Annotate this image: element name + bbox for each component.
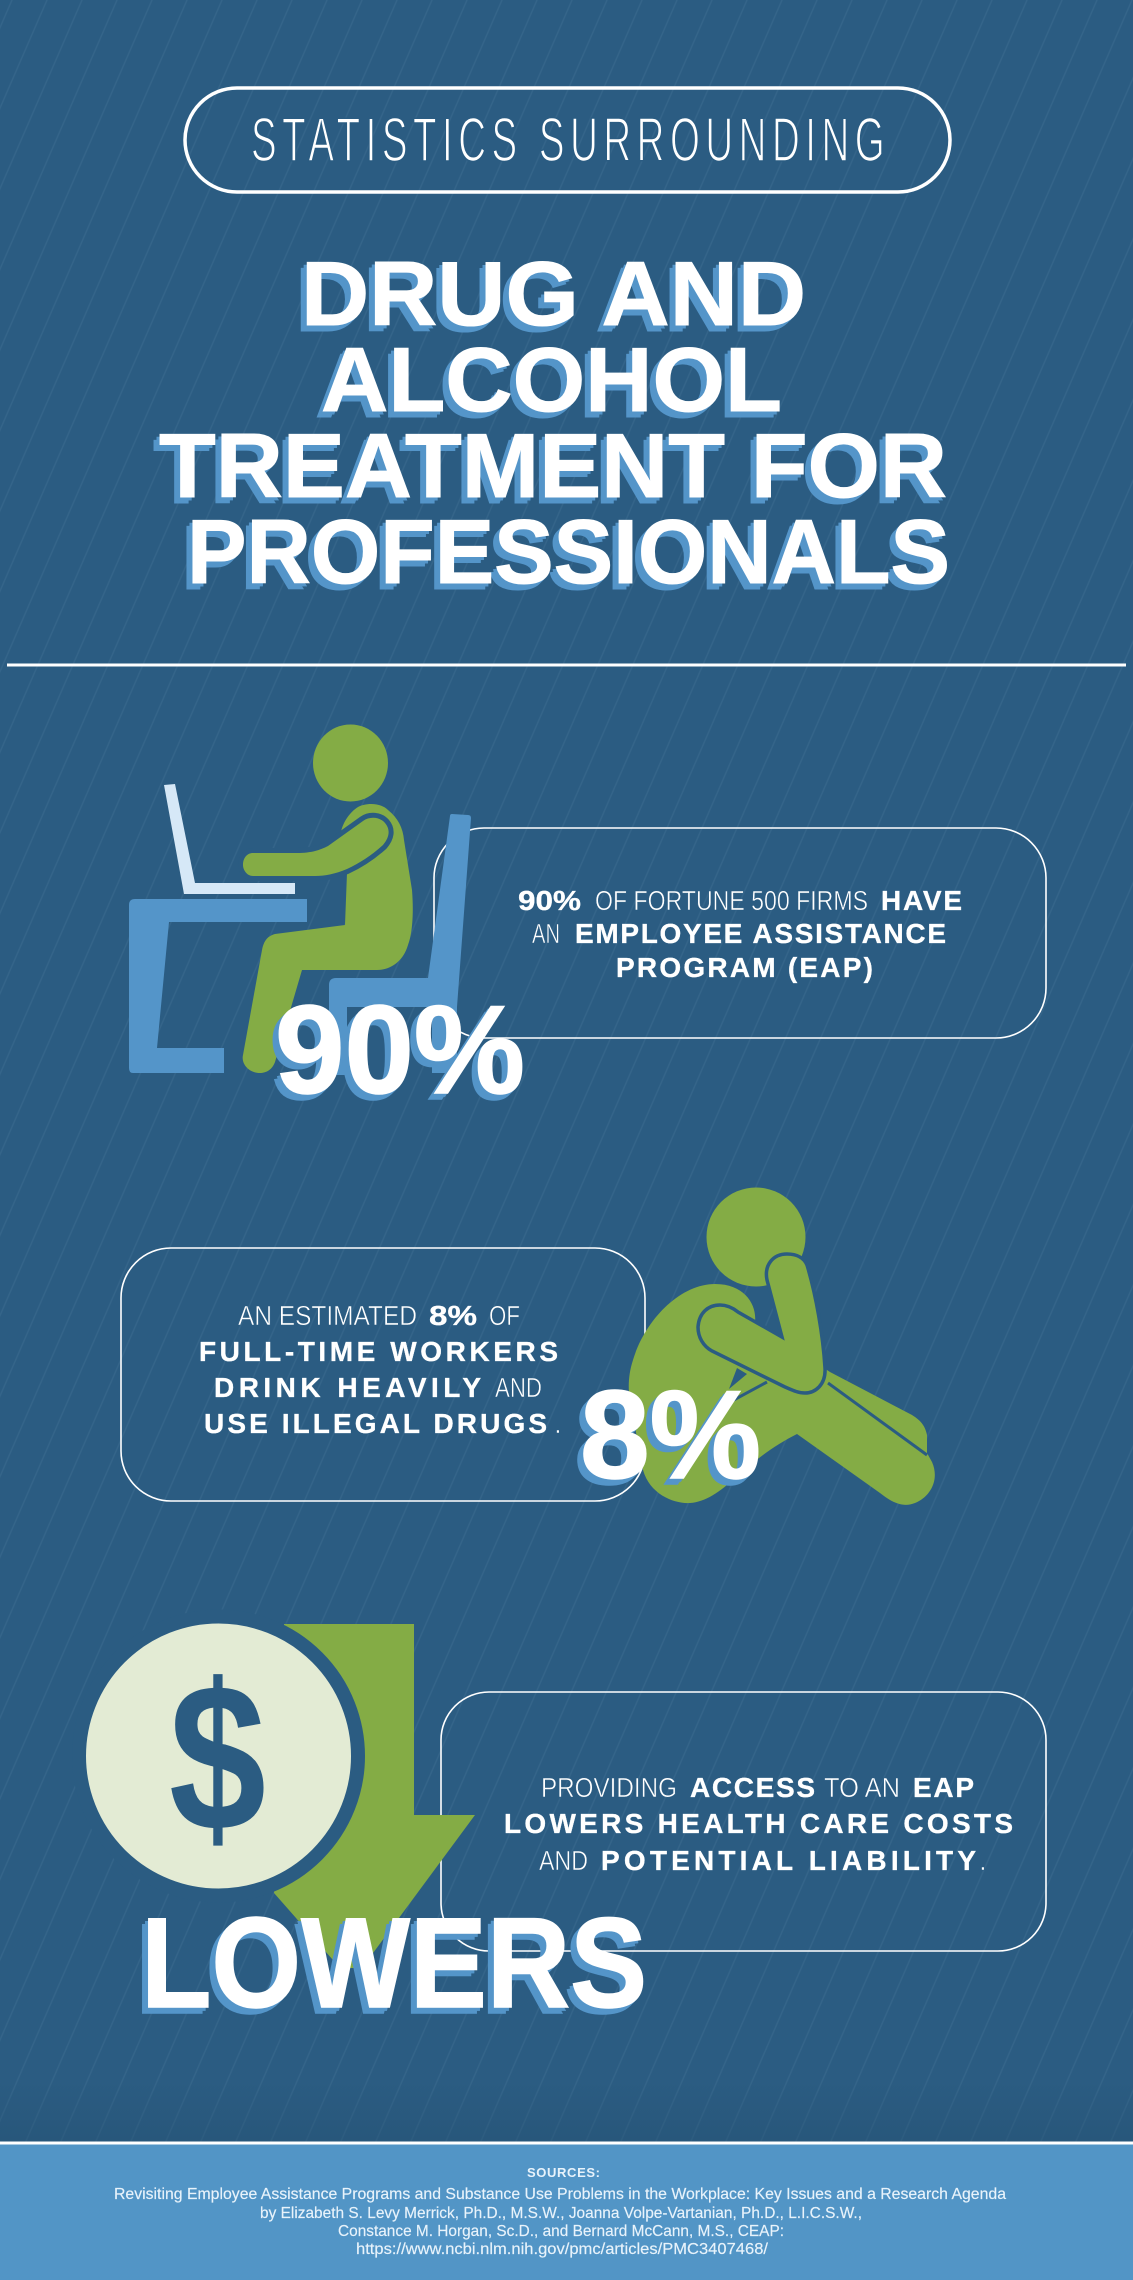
title: PROFESSIONALS	[187, 502, 950, 603]
icon: down arrow	[274, 1624, 475, 1968]
card text: access to an EAP	[504, 1772, 1013, 1876]
icon: dollar coin	[79, 1616, 358, 1896]
card text: access to an EAP: .	[979, 1845, 987, 1876]
chair	[329, 814, 471, 1075]
header pill: statistics surrounding	[185, 88, 950, 192]
gap between thighs	[729, 1368, 747, 1389]
footer: sources: Constance M. Horgan, Sc.D., and Bernard McCann, M.S., CEAP:	[338, 2223, 784, 2240]
title: ALCOHOL	[321, 330, 782, 431]
panel: 90 percent card	[434, 828, 1046, 1038]
desk	[129, 899, 307, 1073]
footer: sources: SOURCES:	[527, 2165, 600, 2180]
card text: full-time workers: AN ESTIMATED	[238, 1300, 417, 1331]
footer: sources: https://www.ncbi.nlm.nih.gov/pmc/articles/PMC3407468/	[356, 2241, 769, 2258]
torso and leg	[243, 804, 413, 1073]
card text: access to an EAP: EAP	[913, 1772, 974, 1803]
card text: full-time workers: USE ILLEGAL DRUGS	[204, 1408, 547, 1439]
panel: 8 percent card	[121, 1248, 645, 1501]
card text: full-time workers: .	[554, 1408, 562, 1439]
card text: access to an EAP: POTENTIAL LIABILITY	[601, 1845, 976, 1876]
card text: full-time workers: 8%	[429, 1300, 477, 1331]
head	[313, 724, 388, 802]
card text: access to an EAP: AND	[539, 1845, 588, 1876]
card text: fortune 500: EMPLOYEE ASSISTANCE	[575, 918, 946, 949]
card text: access to an EAP: TO AN	[824, 1772, 900, 1803]
title: DRUG AND	[301, 244, 806, 345]
card text: access to an EAP: LOWERS HEALTH CARE COSTS	[504, 1808, 1013, 1839]
title: TREATMENT FOR	[159, 416, 947, 517]
body and legs	[629, 1284, 935, 1505]
panel: lowers costs card	[441, 1692, 1046, 1951]
card text: full-time workers: OF	[489, 1300, 520, 1331]
footer: sources	[0, 2142, 1133, 2280]
laptop	[164, 784, 295, 894]
footer: sources: by Elizabeth S. Levy Merrick, Ph.D., M.S.W., Joanna Volpe-Vartanian, Ph.D., L.I.C.S.W.,	[260, 2205, 862, 2222]
arm	[698, 1254, 825, 1393]
big number: 90%: 90%	[275, 981, 525, 1120]
arm	[243, 818, 389, 876]
head	[706, 1188, 806, 1286]
card text: fortune 500: OF FORTUNE 500 FIRMS	[595, 885, 868, 916]
card text: access to an EAP: ACCESS	[690, 1772, 815, 1803]
big word: lowers: LOWERS	[141, 1892, 647, 2035]
card text: fortune 500: HAVE	[881, 885, 962, 916]
card text: full-time workers: DRINK HEAVILY	[214, 1372, 481, 1403]
icon: person at laptop	[129, 724, 471, 1075]
title	[159, 244, 950, 603]
card text: fortune 500: 90%	[518, 885, 581, 916]
card text: fortune 500: AN	[532, 918, 560, 949]
footer: sources: Revisiting Employee Assistance Programs and Substance Use Problems in the Workplace: Key Issues and a Research Agenda	[114, 2186, 1006, 2203]
icon: dollar coin: $	[169, 1640, 266, 1875]
icon: person sitting with head in hand	[629, 1188, 935, 1505]
big number: 8%: 8%	[580, 1366, 761, 1505]
card text: fortune 500	[518, 885, 962, 983]
card text: access to an EAP: PROVIDING	[541, 1772, 677, 1803]
card text: full-time workers	[199, 1300, 562, 1439]
header pill: statistics surrounding: STATISTICS SURROUNDING	[251, 105, 885, 174]
card text: full-time workers: AND	[495, 1372, 542, 1403]
card text: fortune 500: PROGRAM (EAP)	[616, 952, 873, 983]
card text: full-time workers: FULL-TIME WORKERS	[199, 1336, 558, 1367]
